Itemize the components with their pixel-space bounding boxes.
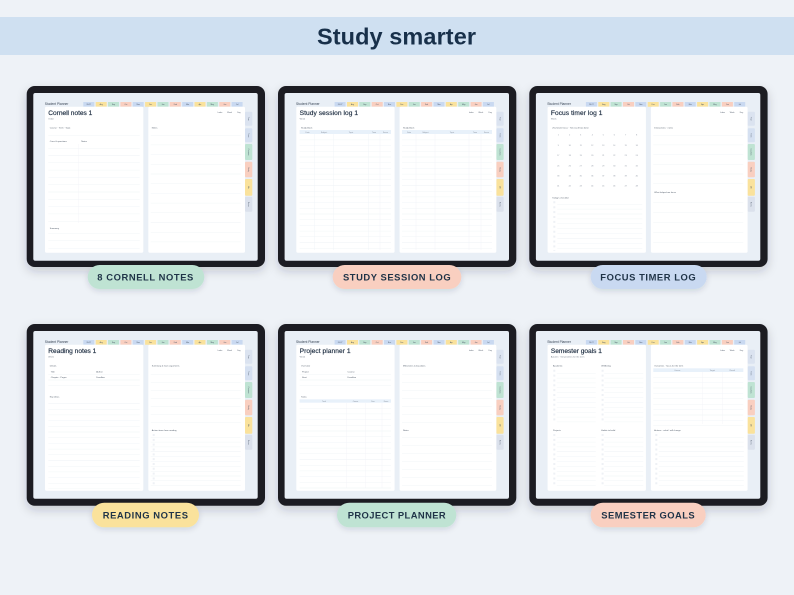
tablet: Semester goals: Nov bbox=[639, 342, 642, 344]
tablet: Reading notes: Apr bbox=[199, 341, 202, 344]
label: Study session log: STUDY SESSION LOG bbox=[343, 271, 451, 282]
tablet: Reading notes: Year bbox=[247, 355, 249, 359]
panel: focus timer grid: 14 bbox=[613, 145, 615, 147]
tablet: Reading notes: Aug bbox=[100, 341, 103, 344]
panel: focus timer grid: 45 bbox=[602, 185, 604, 187]
tablet: Cornell notes: Mar bbox=[186, 104, 190, 106]
panel: project overview and tasks: Due bbox=[371, 401, 375, 403]
tablet: Cornell notes: Day bbox=[237, 112, 241, 114]
tablet: Cornell notes: Study bbox=[247, 167, 250, 172]
panel: session table right: Date bbox=[407, 131, 411, 134]
panel: focus timer grid: 28 bbox=[591, 165, 593, 167]
tablet: Project planner: Day bbox=[489, 350, 492, 352]
panel: project overview and tasks bbox=[300, 364, 391, 489]
panel: goal lists: Academic bbox=[553, 364, 564, 368]
tablet: Study session log: Feb bbox=[425, 104, 428, 106]
tablet: Reading notes: Nov bbox=[137, 342, 140, 344]
panel: milestones table and review: Target bbox=[710, 369, 715, 372]
panel: book details and key ideas: Deadline bbox=[96, 377, 106, 379]
tablet: Project planner: Project planner 1 bbox=[300, 348, 351, 355]
panel: book details and key ideas: Title bbox=[51, 370, 56, 374]
tablet: Study session log: Life bbox=[498, 186, 500, 189]
tablet: Cornell notes: May bbox=[211, 104, 214, 106]
panel: focus timer grid: 21 bbox=[602, 155, 604, 157]
tablet: Study session log: Courses bbox=[498, 149, 500, 155]
panel: summary and quotes: Action items from reading bbox=[152, 429, 177, 432]
panel: focus timer grid: 19 bbox=[580, 155, 582, 157]
panel: session table right: Study block bbox=[403, 126, 415, 130]
panel: focus timer grid: 33 bbox=[557, 175, 559, 177]
tablet: Cornell notes bbox=[27, 86, 265, 267]
label: Study session log bbox=[333, 265, 461, 289]
tablet: Cornell notes: Life bbox=[247, 186, 249, 189]
tablet: Reading notes: Jul bbox=[236, 342, 239, 344]
panel: session table right: Topic bbox=[450, 132, 454, 134]
panel: focus timer grid: 18 bbox=[569, 155, 571, 157]
tablet: Cornell notes: Student Planner bbox=[45, 102, 69, 106]
tablet: Semester goals: Year bbox=[750, 355, 752, 359]
panel: focus timer grid: 41 bbox=[557, 185, 559, 187]
tablet: Reading notes: Jun bbox=[223, 342, 226, 344]
panel: book details and key ideas: Chapter · Pages bbox=[51, 376, 68, 379]
panel: focus timer grid: 37 bbox=[602, 175, 604, 177]
tablet: Project planner: Dec bbox=[400, 342, 404, 344]
tablet: Reading notes: Reading notes 1 bbox=[48, 348, 97, 355]
panel: Cornell left page: Notes bbox=[81, 140, 88, 143]
panel: goal lists: Projects bbox=[553, 429, 562, 432]
panel: focus timer grid: 48 bbox=[636, 185, 638, 187]
tablet: Study session log: Oct bbox=[376, 103, 379, 106]
tablet: Study session log: Year bbox=[498, 117, 500, 121]
panel: Cornell right page: Notes bbox=[152, 126, 158, 130]
tablet: Study session log: May bbox=[462, 104, 465, 106]
tablet: Study session log: 26-27 bbox=[338, 104, 342, 106]
tablet: Cornell notes: Notes bbox=[247, 202, 250, 207]
panel: project overview and tasks: Tasks bbox=[301, 396, 307, 398]
panel: session table right: Focus bbox=[484, 132, 489, 134]
tablet: Cornell notes: Jun bbox=[223, 104, 226, 106]
tablet: Study session log: Study bbox=[498, 167, 501, 172]
tablet: Semester goals bbox=[529, 324, 768, 506]
tablet: Focus timer log: Jan bbox=[664, 104, 667, 106]
panel: project overview and tasks: Start bbox=[302, 376, 307, 379]
panel: goal lists: Habits to build bbox=[601, 429, 616, 432]
panel: session table left bbox=[300, 126, 391, 251]
panel: focus timer grid: 27 bbox=[580, 165, 582, 167]
tablet: Reading notes: Term bbox=[247, 371, 249, 376]
tablet: Focus timer log: Oct bbox=[627, 103, 630, 106]
label: 8 Cornell notes: 8 CORNELL NOTES bbox=[97, 271, 193, 282]
label: Project planner: PROJECT PLANNER bbox=[348, 509, 446, 520]
panel: focus timer grid: 12 bbox=[591, 145, 593, 147]
panel: focus timer grid: 23 bbox=[625, 155, 627, 157]
tablet: Reading notes: Index bbox=[218, 350, 222, 352]
tablet: Study session log: Jan bbox=[413, 104, 416, 106]
tablet: Reading notes: Study bbox=[247, 405, 250, 410]
tablet: Reading notes: Week bbox=[48, 356, 55, 358]
panel: session table left: Date bbox=[306, 131, 310, 134]
tablet: Study session log: Index bbox=[469, 112, 474, 114]
tablet: Project planner: Mar bbox=[437, 342, 441, 344]
panel: Cornell left page: Cues & questions bbox=[50, 140, 68, 143]
panel: milestones and notes: Milestones & key dates bbox=[403, 364, 426, 368]
tablet: Reading notes: Courses bbox=[247, 387, 249, 393]
tablet: Study session log: Week bbox=[300, 118, 306, 120]
tablet: Cornell notes: Courses bbox=[247, 149, 249, 155]
tablet: Semester goals: Apr bbox=[701, 341, 704, 344]
label: Reading notes bbox=[92, 503, 199, 527]
panel: session table left: Focus bbox=[383, 132, 388, 134]
panel: focus timer grid: 26 bbox=[569, 165, 571, 167]
tablet: Focus timer log: Jun bbox=[726, 104, 729, 106]
tablet: Semester goals: Dec bbox=[652, 342, 655, 344]
panel: milestones table and review bbox=[653, 364, 743, 489]
tablet: Study session log: Mar bbox=[437, 104, 441, 106]
label: Project planner bbox=[337, 503, 456, 527]
panel: session checklist: Today's checklist bbox=[552, 196, 569, 200]
tablet: Reading notes bbox=[27, 324, 265, 506]
panel: focus timer grid: 31 bbox=[625, 165, 627, 167]
panel: focus timer grid: 47 bbox=[625, 185, 627, 187]
panel: focus timer grid: 25 bbox=[557, 165, 559, 167]
label: Reading notes: READING NOTES bbox=[103, 509, 188, 520]
tablet: Focus timer log: Day bbox=[740, 112, 743, 114]
panel: project overview and tasks: Course bbox=[348, 370, 355, 374]
panel: book details and key ideas: Details bbox=[50, 364, 57, 368]
tablet: Reading notes: Student Planner bbox=[45, 340, 69, 344]
tablet: Project planner: Apr bbox=[450, 341, 453, 344]
tablet: Project planner: Feb bbox=[425, 342, 428, 344]
panel: Cornell left page: Course · Term · Topic bbox=[50, 126, 71, 130]
panel: project overview and tasks: Project bbox=[302, 370, 309, 374]
panel: focus timer grid: 30 bbox=[613, 165, 615, 167]
tablet: Study session log: Week bbox=[478, 112, 483, 114]
tablet: Focus timer log: Notes bbox=[750, 202, 753, 207]
panel: session table right: Time bbox=[473, 132, 477, 134]
panel: milestones table and review: Actions · what I will change bbox=[654, 429, 681, 432]
tablet: Semester goals: Day bbox=[740, 350, 743, 352]
panel: session table left: Topic bbox=[349, 132, 353, 134]
panel: focus timer grid: 16 bbox=[636, 145, 638, 147]
tablet: Study session log: Dec bbox=[400, 104, 404, 106]
tablet: Study session log: Term bbox=[498, 133, 500, 138]
panel: goal lists bbox=[553, 364, 624, 489]
panel: session table right: Subject bbox=[422, 131, 429, 134]
tablet: Project planner: 26-27 bbox=[338, 342, 342, 344]
tablet: Project planner: Student Planner bbox=[296, 340, 321, 344]
panel: focus timer grid: 24 bbox=[636, 155, 638, 157]
panel: focus timer grid: 6 bbox=[614, 135, 615, 137]
tablet: Study session log: Sep bbox=[363, 104, 366, 106]
panel: focus timer grid: 2 bbox=[569, 135, 570, 137]
panel: project overview and tasks: Task bbox=[322, 401, 326, 403]
panel: Cornell right page bbox=[152, 126, 196, 248]
tablet: Semester goals: Oct bbox=[627, 341, 630, 344]
panel: focus timer grid: 32 bbox=[636, 165, 638, 167]
tablet: Study session log: Study session log 1 bbox=[300, 110, 358, 117]
tablet: Cornell notes: Sep bbox=[112, 104, 115, 106]
panel: focus timer grid: 22 bbox=[613, 155, 615, 157]
panel: book details and key ideas: Key ideas bbox=[50, 396, 60, 398]
tablet: Project planner: Index bbox=[469, 350, 474, 352]
tablet: Reading notes: Dec bbox=[149, 342, 152, 344]
tablet: Semester goals: Jul bbox=[739, 342, 741, 344]
tablet: Reading notes: Feb bbox=[174, 342, 177, 344]
tablet: Semester goals: May bbox=[713, 342, 717, 344]
tablet: Focus timer log: 26-27 bbox=[589, 104, 594, 106]
tablet: Project planner: Oct bbox=[376, 341, 379, 344]
tablet: Study session log: Student Planner bbox=[296, 102, 321, 106]
tablet: Focus timer log: Life bbox=[750, 186, 752, 189]
tablet: Reading notes: Oct bbox=[125, 341, 128, 344]
tablet: Study session log: Aug bbox=[351, 103, 354, 106]
panel: project overview and tasks: Owner bbox=[353, 400, 359, 403]
panel: project overview and tasks: Overview bbox=[301, 364, 311, 368]
tablet: Focus timer log: Week bbox=[730, 112, 735, 114]
tablet: Project planner: Aug bbox=[351, 341, 354, 344]
panel: focus timer grid: 29 bbox=[602, 165, 604, 167]
tablet: Project planner: Nov bbox=[388, 342, 391, 344]
panel: project overview and tasks: Done bbox=[384, 401, 388, 403]
panel: focus timer grid: 7 bbox=[625, 135, 626, 137]
panel: milestones and notes: Notes bbox=[403, 429, 410, 432]
panel: goal lists: Wellbeing bbox=[601, 366, 612, 368]
panel: focus timer grid: 9 bbox=[558, 145, 559, 147]
tablet: Focus timer log: Courses bbox=[750, 149, 752, 155]
panel: focus timer grid: 5 bbox=[603, 135, 604, 137]
panel: session table left: Subject bbox=[321, 131, 328, 134]
panel: focus timer grid: 39 bbox=[625, 175, 627, 177]
tablet: Project planner: Week bbox=[300, 356, 306, 358]
tablet: Cornell notes: Order bbox=[48, 118, 54, 120]
tablet: Project planner: Sep bbox=[363, 342, 366, 344]
tablet: Project planner: Week bbox=[478, 350, 483, 352]
panel: focus timer grid: 46 bbox=[613, 185, 615, 187]
panel: focus timer grid: 25-minute focus · Tick each box done bbox=[552, 126, 589, 130]
tablet: Study session log: Day bbox=[489, 112, 492, 114]
tablet: Semester goals: Sep bbox=[614, 342, 618, 344]
panel: session table left: Study block bbox=[301, 126, 313, 130]
tablet: Reading notes: Day bbox=[237, 350, 241, 352]
tablet: Cornell notes: Aug bbox=[100, 103, 103, 106]
tablet: Project planner: Notes bbox=[498, 440, 501, 445]
panel: book details and key ideas: Author bbox=[96, 370, 103, 374]
panel: focus timer grid: 20 bbox=[591, 155, 593, 157]
tablet: Cornell notes: 26-27 bbox=[86, 104, 91, 106]
tablet: Focus timer log: Focus timer log 1 bbox=[551, 110, 603, 117]
panel: summary and quotes bbox=[152, 364, 196, 489]
tablet: Focus timer log: Jul bbox=[739, 104, 741, 106]
tablet: Semester goals: Notes bbox=[750, 440, 753, 445]
tablet: Semester goals: Week bbox=[730, 350, 735, 352]
panel: focus timer grid: 10 bbox=[569, 145, 571, 147]
panel: focus timer grid: 11 bbox=[580, 145, 582, 147]
tablet: Focus timer log: Dec bbox=[652, 104, 655, 106]
panel: focus timer grid: 15 bbox=[625, 145, 627, 147]
tablet: Focus timer log: Feb bbox=[676, 104, 679, 106]
panel: Cornell left page bbox=[50, 126, 94, 251]
panel: focus notes: Distractions · notes bbox=[654, 126, 674, 130]
panel: focus timer grid: 17 bbox=[557, 155, 559, 157]
tablet: Semester goals: Mar bbox=[689, 342, 692, 344]
tablet: Semester goals: Term bbox=[750, 371, 752, 376]
panel: focus timer grid bbox=[552, 126, 638, 187]
tablet: Semester goals: 26-27 bbox=[589, 342, 594, 344]
tablet: Reading notes: 26-27 bbox=[86, 342, 91, 344]
tablet: Reading notes: Notes bbox=[247, 440, 250, 445]
tablet: Project planner: Courses bbox=[498, 387, 500, 393]
tablet: Reading notes: Life bbox=[247, 424, 249, 427]
tablet: Project planner: Year bbox=[498, 355, 500, 359]
tablet: Focus timer log: Term bbox=[750, 133, 752, 138]
tablet: Focus timer log: Week bbox=[551, 118, 557, 120]
tablet: Reading notes: May bbox=[211, 342, 214, 344]
tablet: Project planner: Study bbox=[498, 405, 501, 410]
label: Focus timer log: FOCUS TIMER LOG bbox=[600, 271, 696, 282]
label: Focus timer log bbox=[591, 265, 707, 289]
tablet: Study session log: Notes bbox=[498, 202, 501, 207]
tablet: Semester goals: Autumn · Set priorities for the term bbox=[551, 356, 585, 358]
panel: focus timer grid: 8 bbox=[636, 135, 637, 137]
tablet: Focus timer log: May bbox=[713, 104, 717, 106]
tablet: Study session log: Apr bbox=[450, 103, 453, 106]
panel: focus timer grid: 43 bbox=[580, 185, 582, 187]
tablet: Focus timer log: Aug bbox=[602, 103, 605, 106]
tablet: Focus timer log bbox=[529, 86, 768, 267]
panel: project overview and tasks: Deadline bbox=[348, 377, 357, 379]
header band bbox=[0, 17, 794, 55]
tablet: Project planner: Jun bbox=[475, 342, 478, 344]
panel: milestones table and review: Result bbox=[730, 369, 735, 372]
tablet: Cornell notes: Feb bbox=[174, 104, 177, 106]
tablet: Focus timer log: Year bbox=[750, 117, 752, 121]
tablet: Cornell notes: Term bbox=[247, 133, 249, 138]
tablet: Cornell notes: Cornell notes 1 bbox=[48, 110, 93, 117]
panel: focus timer grid: 44 bbox=[591, 185, 593, 187]
tablet: Semester goals: Study bbox=[750, 405, 753, 410]
tablet: Cornell notes: Jan bbox=[162, 104, 164, 106]
panel: Cornell left page: Summary bbox=[50, 227, 60, 230]
tablet: Semester goals: Semester goals 1 bbox=[551, 348, 602, 355]
tablet: Project planner: Life bbox=[498, 424, 500, 427]
title: Study smarter bbox=[317, 24, 476, 50]
tablet: Cornell notes: Index bbox=[218, 112, 222, 114]
panel: focus timer grid: 1 bbox=[558, 135, 559, 137]
panel: milestones and notes bbox=[403, 364, 447, 489]
tablet: Cornell notes: Apr bbox=[199, 103, 202, 106]
tablet: Semester goals: Aug bbox=[602, 341, 605, 344]
tablet: Cornell notes: Dec bbox=[149, 104, 152, 106]
tablet: Focus timer log: Study bbox=[750, 167, 753, 172]
panel: focus timer grid: 40 bbox=[636, 175, 638, 177]
tablet: Project planner: May bbox=[462, 342, 465, 344]
label: Semester goals bbox=[591, 503, 706, 527]
panel: focus timer grid: 36 bbox=[591, 175, 593, 177]
panel: focus notes: What helped me focus bbox=[654, 191, 677, 194]
tablet: Semester goals: Jan bbox=[664, 342, 667, 344]
tablet: Cornell notes: Year bbox=[247, 117, 249, 121]
tablet: Focus timer log: Sep bbox=[614, 104, 618, 106]
tablet: Semester goals: Index bbox=[720, 350, 725, 352]
tablet: Semester goals: Student Planner bbox=[547, 340, 572, 344]
panel: session table right bbox=[402, 126, 492, 251]
tablet: Semester goals: Feb bbox=[676, 342, 679, 344]
tablet: Study session log: Jun bbox=[475, 104, 478, 106]
tablet: Study session log: Jul bbox=[487, 104, 490, 106]
tablet: Focus timer log: Nov bbox=[639, 104, 642, 106]
panel: focus timer grid: 3 bbox=[580, 135, 581, 137]
panel: summary and quotes: Summary & main arguments bbox=[152, 364, 180, 368]
panel: session table left: Time bbox=[372, 132, 376, 134]
panel: session checklist bbox=[552, 196, 600, 251]
tablet: Project planner: Term bbox=[498, 371, 500, 376]
panel: book details and key ideas bbox=[50, 364, 106, 489]
panel: focus timer grid: 4 bbox=[592, 135, 593, 137]
tablet: Project planner: Jan bbox=[413, 342, 416, 344]
tablet: Focus timer log: Apr bbox=[701, 103, 704, 106]
tablet: Study session log bbox=[278, 86, 516, 267]
tablet: Semester goals: Courses bbox=[750, 387, 752, 393]
tablet: Cornell notes: Week bbox=[227, 112, 232, 114]
tablet: Reading notes: Sep bbox=[112, 342, 115, 344]
panel: focus timer grid: 42 bbox=[569, 185, 571, 187]
tablet: Cornell notes: Nov bbox=[137, 104, 140, 106]
tablet: Cornell notes: Oct bbox=[125, 103, 128, 106]
panel: milestones table and review: Course bbox=[674, 369, 680, 372]
panel: milestones table and review: Outcomes · focus for the term bbox=[654, 364, 683, 368]
panel: focus timer grid: 13 bbox=[602, 145, 604, 147]
panel: focus timer grid: 34 bbox=[569, 175, 571, 177]
tablet: Project planner bbox=[278, 324, 516, 506]
panel: focus timer grid: 35 bbox=[580, 175, 582, 177]
tablet: Focus timer log: Index bbox=[720, 112, 725, 114]
tablet: Reading notes: Week bbox=[227, 350, 232, 352]
tablet: Focus timer log: Student Planner bbox=[547, 102, 572, 106]
tablet: Focus timer log: Mar bbox=[689, 104, 692, 106]
panel: focus notes bbox=[654, 126, 698, 251]
tablet: Study session log: Nov bbox=[388, 104, 391, 106]
panel: focus timer grid: 38 bbox=[613, 175, 615, 177]
tablet: Reading notes: Jan bbox=[162, 342, 164, 344]
label: 8 Cornell notes bbox=[88, 265, 204, 289]
label: Semester goals: SEMESTER GOALS bbox=[601, 509, 695, 520]
tablet: Project planner: Jul bbox=[487, 342, 490, 344]
tablet: Cornell notes: Jul bbox=[236, 104, 239, 106]
tablet: Semester goals: Life bbox=[750, 424, 752, 427]
tablet: Reading notes: Mar bbox=[186, 342, 190, 344]
tablet: Semester goals: Jun bbox=[726, 342, 729, 344]
